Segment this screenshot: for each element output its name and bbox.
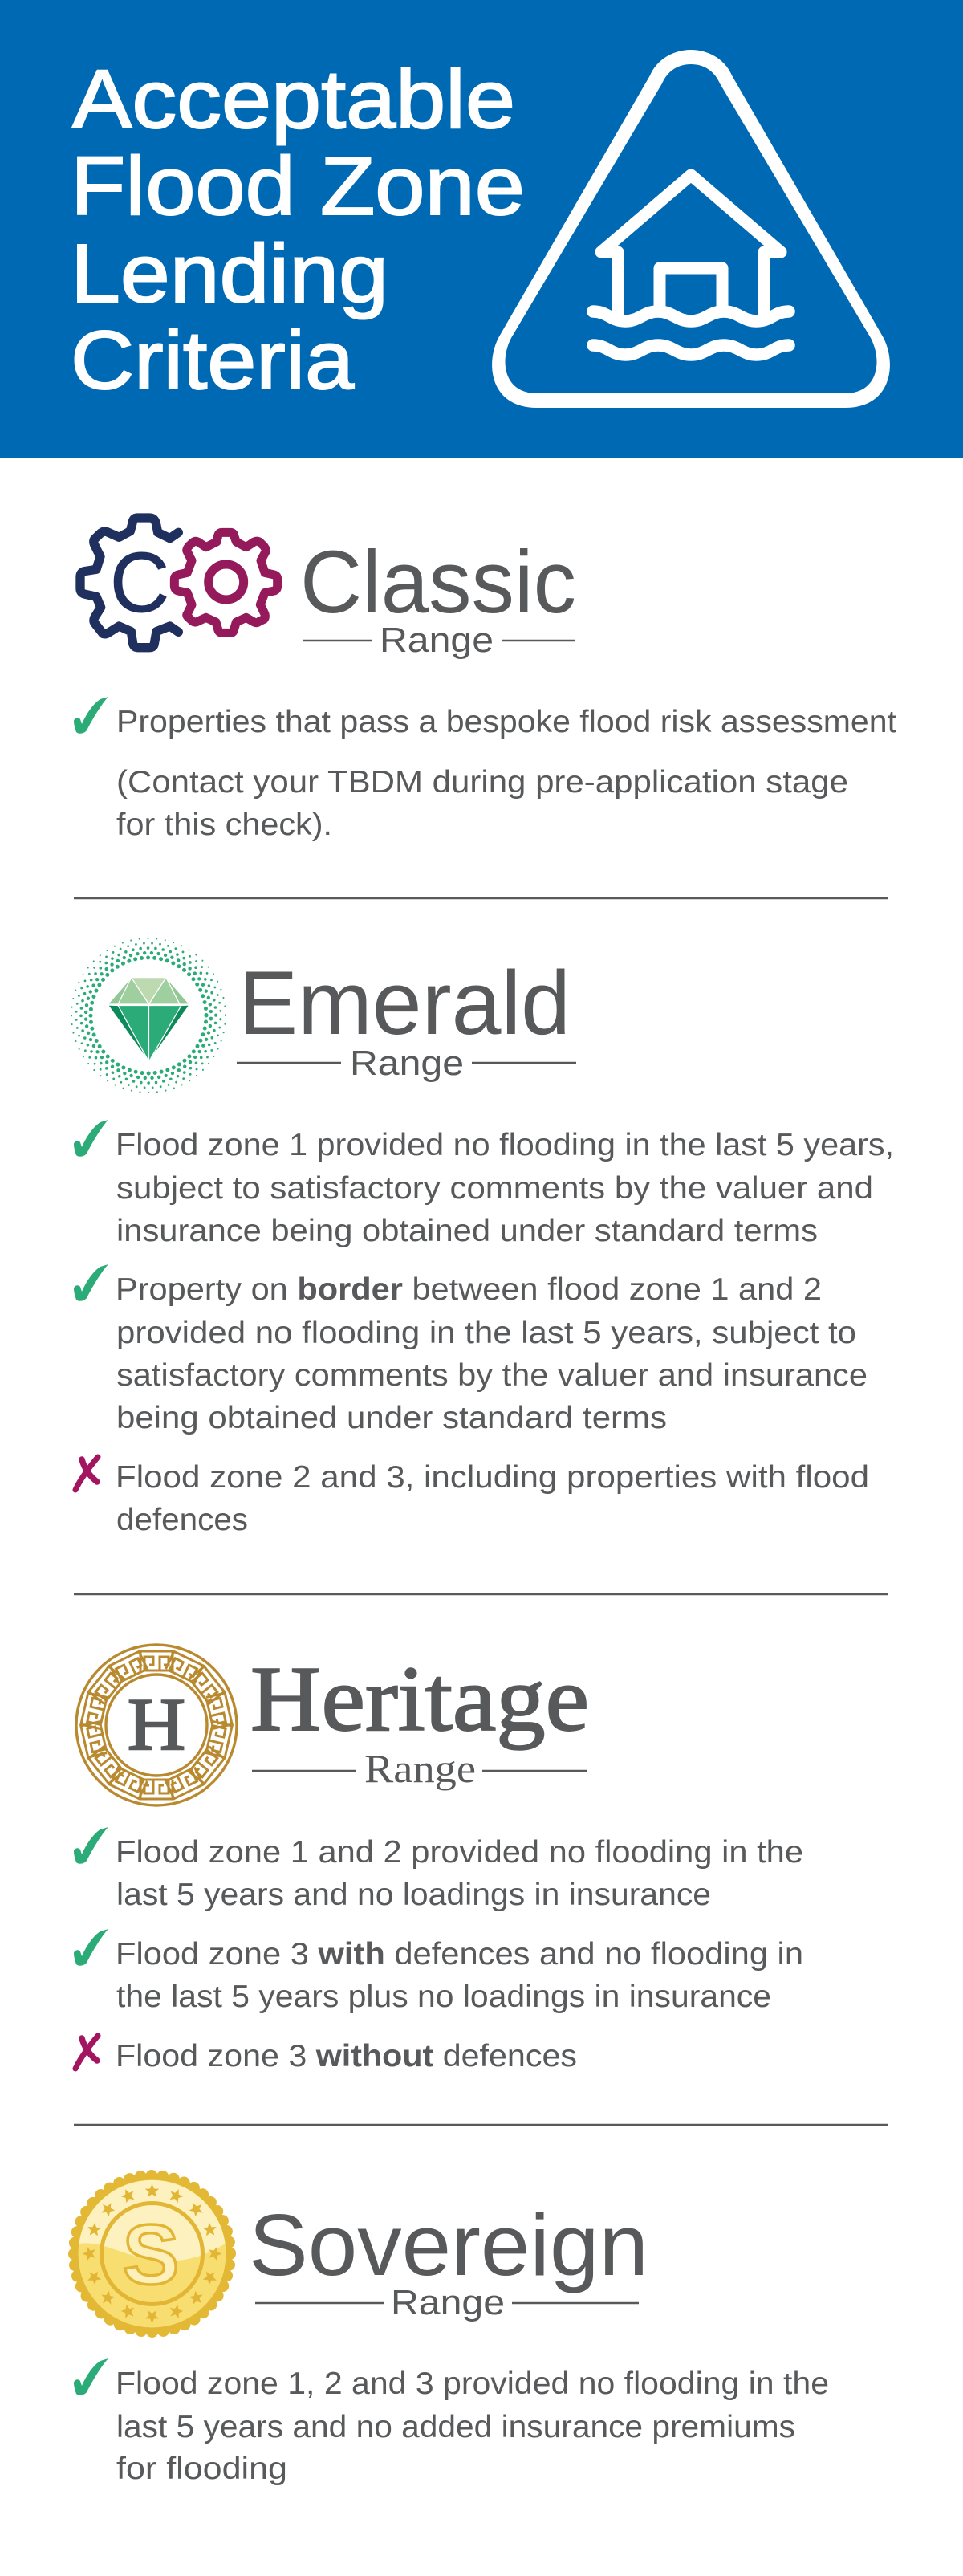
text: classic criterion: for this check). [116, 808, 332, 842]
text: heritage criterion 2 [116, 1937, 803, 2014]
icon: check [74, 1827, 108, 1864]
title: Lending [71, 227, 388, 319]
range name: heritage: Heritage [250, 1648, 589, 1750]
text: emerald criterion 1: Flood zone 1 provided no flooding in the last 5 years, [116, 1128, 894, 1162]
text: sovereign criterion: last 5 years and no added insurance premiums [116, 2410, 795, 2444]
text: emerald criterion 1: subject to satisfactory comments by the valuer and [116, 1171, 873, 1206]
icon: check [74, 2358, 108, 2395]
text: emerald criterion 2: Property on border between flood zone 1 and 2 [116, 1272, 822, 1307]
panel: emerald range [71, 938, 894, 1537]
icon: cross [75, 2036, 98, 2069]
range name: classic: Classic [300, 533, 576, 632]
logo: sovereign coin [72, 2174, 233, 2334]
text: emerald criterion 2: being obtained under standard terms [116, 1401, 667, 1435]
icon: cross [75, 1457, 98, 1490]
text: sovereign criterion: for flooding [116, 2452, 287, 2486]
panel: sovereign range [72, 2174, 829, 2486]
text: sovereign criterion: Flood zone 1, 2 and 3 provided no flooding in the [116, 2366, 829, 2401]
logo letter C: C [110, 535, 169, 630]
header banner [0, 0, 963, 458]
text: classic criterion: (Contact your TBDM during pre-application stage [116, 765, 848, 800]
text: heritage criterion 1 [116, 1835, 803, 1912]
text: emerald criterion 1: insurance being obtained under standard terms [116, 1214, 818, 1248]
text: heritage criterion 1: last 5 years and no loadings in insurance [116, 1878, 711, 1912]
icon: flood warning triangle with house [492, 50, 890, 408]
icon: check [74, 1120, 108, 1157]
logo: emerald [71, 938, 226, 1093]
text: heritage criterion 2: Flood zone 3 with defences and no flooding in [116, 1937, 803, 1972]
text: emerald criterion 2: provided no flooding in the last 5 years, subject to [116, 1316, 856, 1350]
text: emerald criterion 2: satisfactory comments by the valuer and insurance [116, 1358, 868, 1393]
range label: heritage: Range [364, 1746, 476, 1791]
title [71, 53, 525, 406]
logo: classic gears [80, 518, 278, 648]
text: classic criterion [116, 705, 896, 842]
range label: sovereign: Range [391, 2283, 505, 2322]
range name: sovereign: Sovereign [249, 2196, 648, 2294]
title: Criteria [71, 314, 355, 406]
title: Flood Zone [71, 140, 525, 232]
logo: sovereign coin: S [123, 2208, 179, 2302]
text: classic criterion: Properties that pass a bespoke flood risk assessment [116, 705, 896, 739]
text: emerald exclusion: Flood zone 2 and 3, including properties with flood [116, 1460, 869, 1495]
range label: classic: Range [380, 621, 494, 660]
logo: heritage medallion [76, 1645, 237, 1805]
text: heritage criterion 1: Flood zone 1 and 2 provided no flooding in the [116, 1835, 803, 1870]
range label: emerald: Range [350, 1044, 464, 1083]
text: emerald criterion 2 [116, 1272, 868, 1435]
panel: classic range [74, 518, 896, 842]
text: sovereign criterion [116, 2366, 829, 2486]
title: Acceptable [72, 53, 515, 145]
panel: heritage range [74, 1645, 803, 2073]
range name: emerald: Emerald [238, 953, 571, 1053]
icon: check [74, 1929, 108, 1966]
icon: check [74, 1264, 108, 1301]
icon: check [74, 697, 108, 734]
text: emerald exclusion: defences [116, 1503, 248, 1537]
icon: gem [108, 978, 189, 1062]
text: emerald criterion 1 [116, 1128, 894, 1248]
text: heritage criterion 2: the last 5 years plus no loadings in insurance [116, 1980, 771, 2014]
logo: heritage medallion: H [128, 1683, 185, 1765]
text: emerald exclusion [116, 1460, 869, 1537]
text: heritage exclusion: Flood zone 3 without defences [116, 2039, 577, 2073]
